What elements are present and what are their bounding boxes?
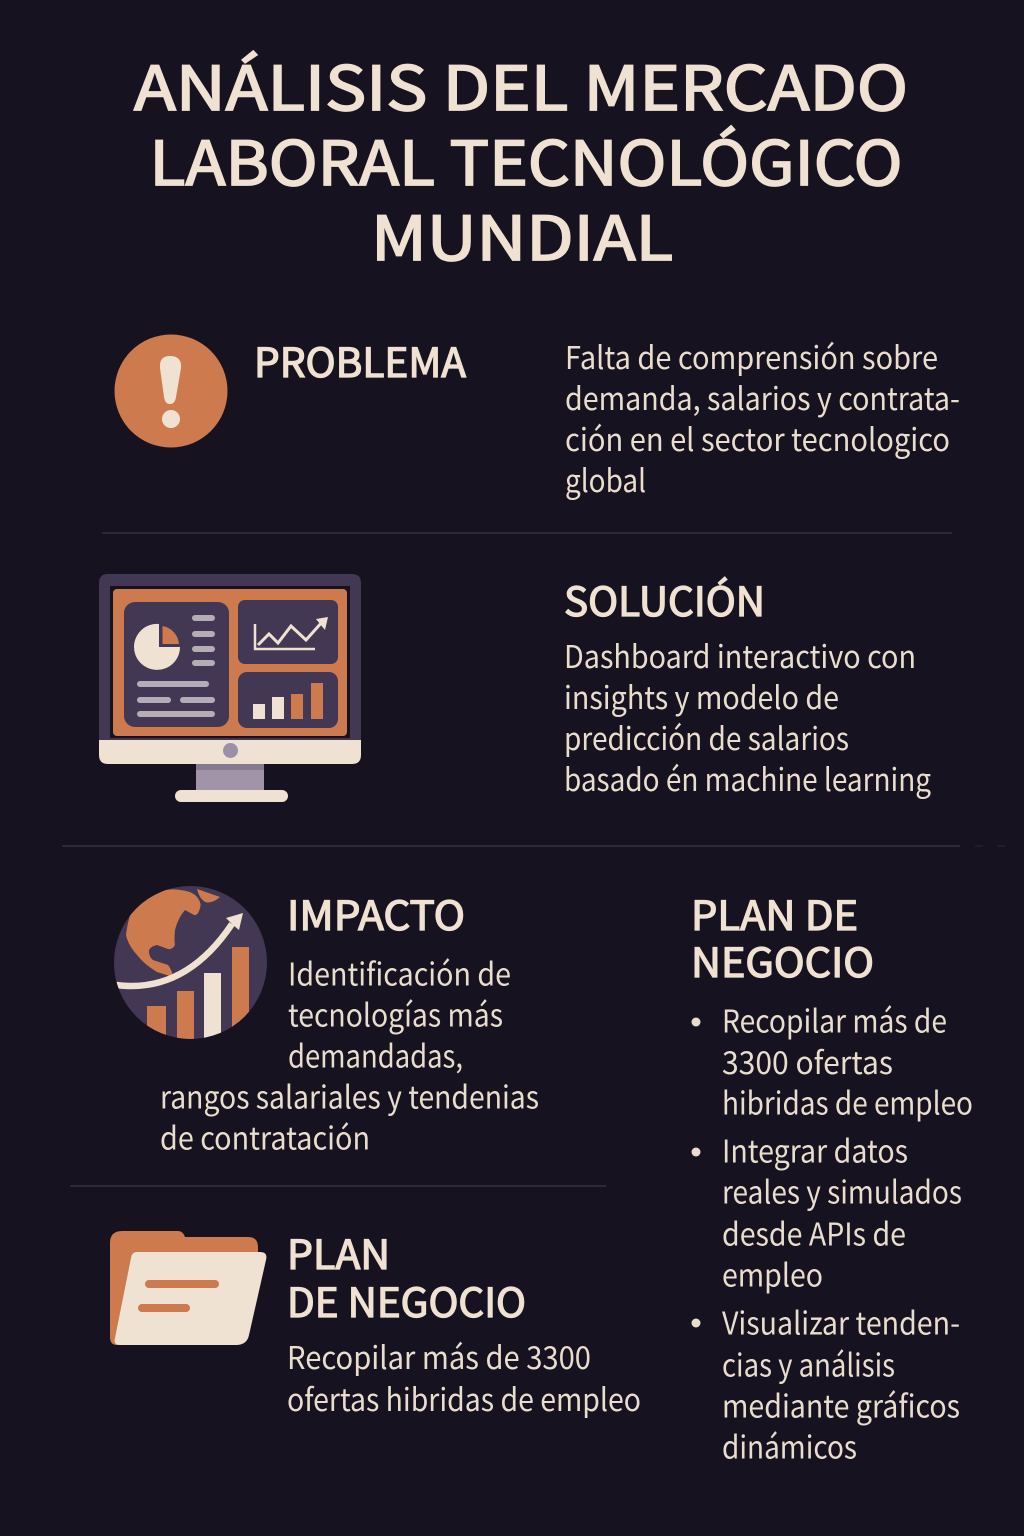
heading: plan de negocio (691, 884, 874, 989)
panel: solución (99, 570, 931, 802)
text: solución description: predicción de salarios (564, 714, 849, 760)
heading: impacto: IMPACTO (287, 884, 465, 942)
icon: folder (110, 1231, 266, 1345)
list item 3 (692, 1298, 960, 1468)
text: problema description: global (565, 456, 646, 502)
list item 3: dinámicos (722, 1422, 857, 1468)
list item 2: Integrar datos (722, 1126, 908, 1172)
list item 1: Recopilar más de (722, 996, 947, 1042)
text: plan de negocio description (287, 1333, 641, 1421)
text: problema description: demanda, salarios y contrata- (565, 374, 960, 420)
title (134, 39, 908, 278)
heading: problema: PROBLEMA (254, 331, 467, 389)
text: problema description: ción en el sector tecnologico (565, 415, 950, 461)
panel: impacto (114, 884, 539, 1160)
text: impacto description: rangos salariales y tendenias (160, 1072, 539, 1118)
list item 2: reales y simulados (722, 1168, 962, 1214)
text: solución description: basado én machine learning (564, 755, 931, 801)
text: impacto description (160, 950, 539, 1160)
heading: solución: SOLUCIÓN (564, 570, 765, 628)
panel: problema (114, 331, 960, 502)
text: plan de negocio description: ofertas hibridas de empleo (287, 1375, 641, 1421)
heading: plan de negocio: PLAN DE (691, 884, 858, 942)
text: solución description: Dashboard interactivo con (564, 632, 916, 678)
icon: globe with growth chart (114, 886, 267, 1046)
panel: plan de negocio (izquierda) (110, 1223, 641, 1421)
text: impacto description: de contratación (160, 1114, 370, 1160)
heading: plan de negocio (287, 1223, 526, 1329)
text: problema description (565, 333, 960, 502)
title: LABORAL TECNOLÓGICO (150, 114, 902, 203)
text: problema description: Falta de comprensión sobre (565, 333, 938, 379)
text: plan de negocio description: Recopilar más de 3300 (287, 1333, 591, 1379)
list item 3: Visualizar tenden- (722, 1298, 960, 1344)
list item 2: desde APIs de (722, 1210, 906, 1256)
list item 1: hibridas de empleo (722, 1078, 973, 1124)
list item 3: cias y análisis (722, 1340, 895, 1386)
list item 1 (692, 996, 973, 1124)
list item 2: empleo (722, 1250, 823, 1296)
text: impacto description: Identificación de (288, 950, 511, 996)
panel: plan de negocio (derecha) (691, 884, 973, 1468)
heading: plan de negocio: DE NEGOCIO (287, 1271, 526, 1329)
title: MUNDIAL (371, 189, 673, 278)
list item 2 (692, 1126, 962, 1296)
text: solución description: insights y modelo de (564, 673, 839, 719)
text: impacto description: tecnologías más (288, 990, 503, 1036)
list item 1: 3300 ofertas (722, 1038, 893, 1084)
icon: warning exclamation (114, 334, 228, 448)
icon: dashboard monitor (99, 574, 361, 802)
text: impacto description: demandadas, (288, 1032, 463, 1078)
title: ANÁLISIS DEL MERCADO (134, 39, 908, 128)
heading: plan de negocio: PLAN (287, 1223, 390, 1281)
heading: plan de negocio: NEGOCIO (691, 931, 874, 989)
list item 3: mediante gráficos (722, 1382, 960, 1428)
text: solución description (564, 632, 931, 801)
